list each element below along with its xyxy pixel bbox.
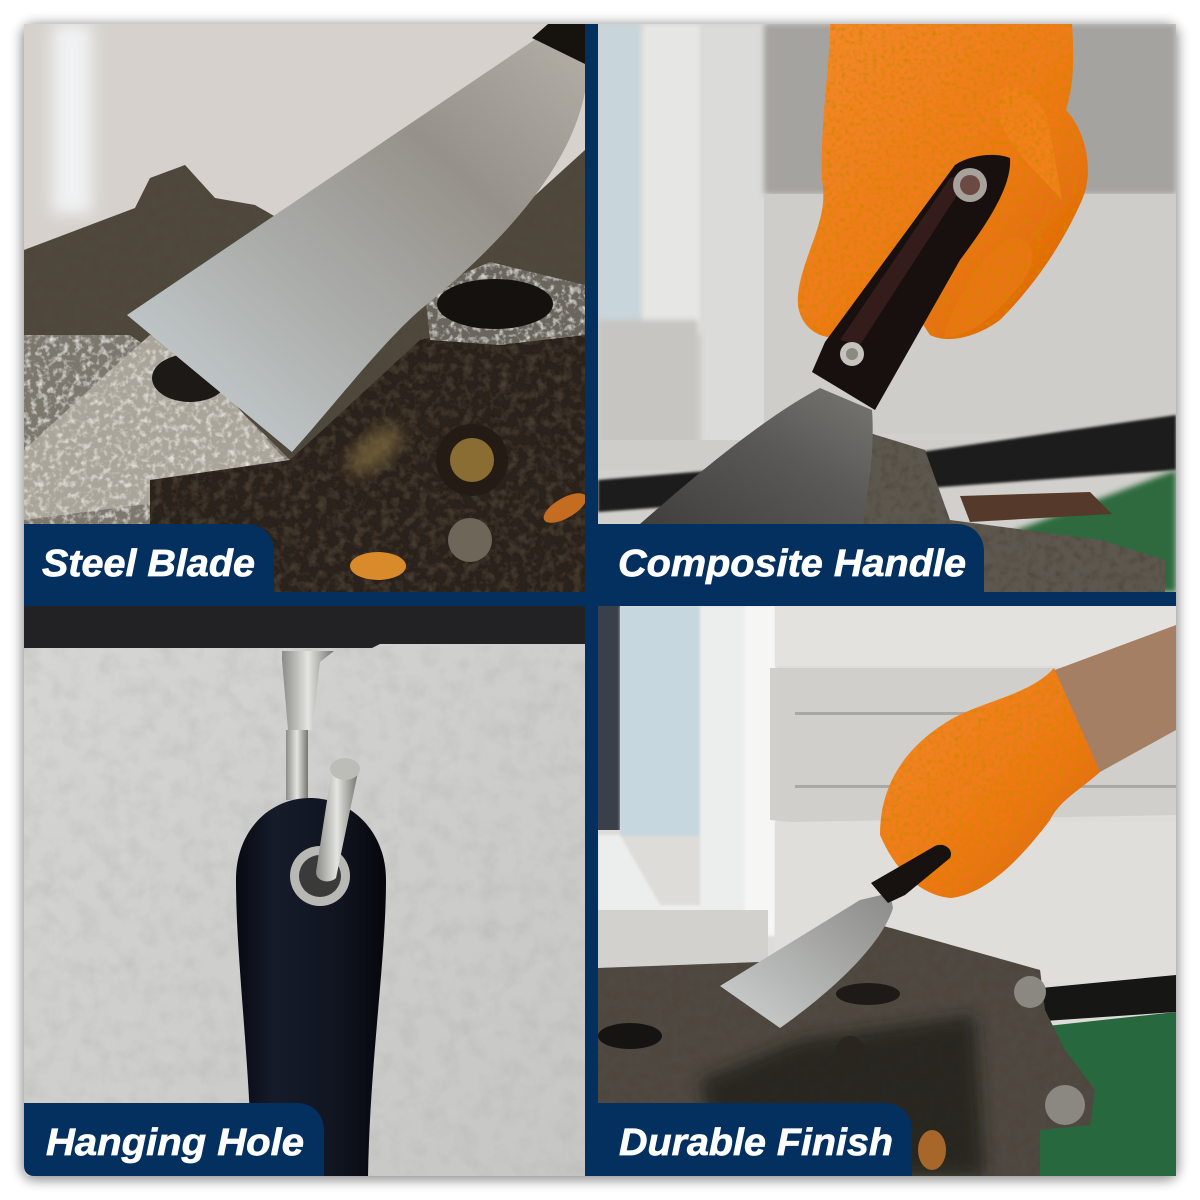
- label: Hanging Hole: [24, 1103, 324, 1176]
- shelf bar: [24, 606, 585, 648]
- icon: scraper blade: [640, 388, 873, 524]
- label: Composite Handle: [598, 524, 984, 592]
- icon: scraper: [720, 845, 951, 1028]
- panel: durable finish: [598, 606, 1176, 1176]
- label: Steel Blade: [24, 524, 274, 592]
- label: Composite Handle: Composite Handle: [618, 543, 966, 585]
- label: Hanging Hole: Hanging Hole: [46, 1122, 304, 1164]
- label: Durable Finish: Durable Finish: [619, 1122, 893, 1164]
- label: Durable Finish: [598, 1103, 912, 1176]
- icon: hook: [282, 651, 334, 800]
- icon: scraper blade closeup: [127, 24, 585, 452]
- panel: steel blade: [24, 24, 591, 592]
- engine block: [598, 925, 1095, 1176]
- icon: black handle with hanging hole: [236, 758, 386, 1176]
- icon: gloved hand with handle: [798, 24, 1088, 410]
- label: Steel Blade: Steel Blade: [42, 543, 255, 585]
- icon: gloved hand and arm: [880, 625, 1176, 898]
- panel: hanging hole: [24, 606, 585, 1176]
- panel: composite handle: [598, 24, 1176, 592]
